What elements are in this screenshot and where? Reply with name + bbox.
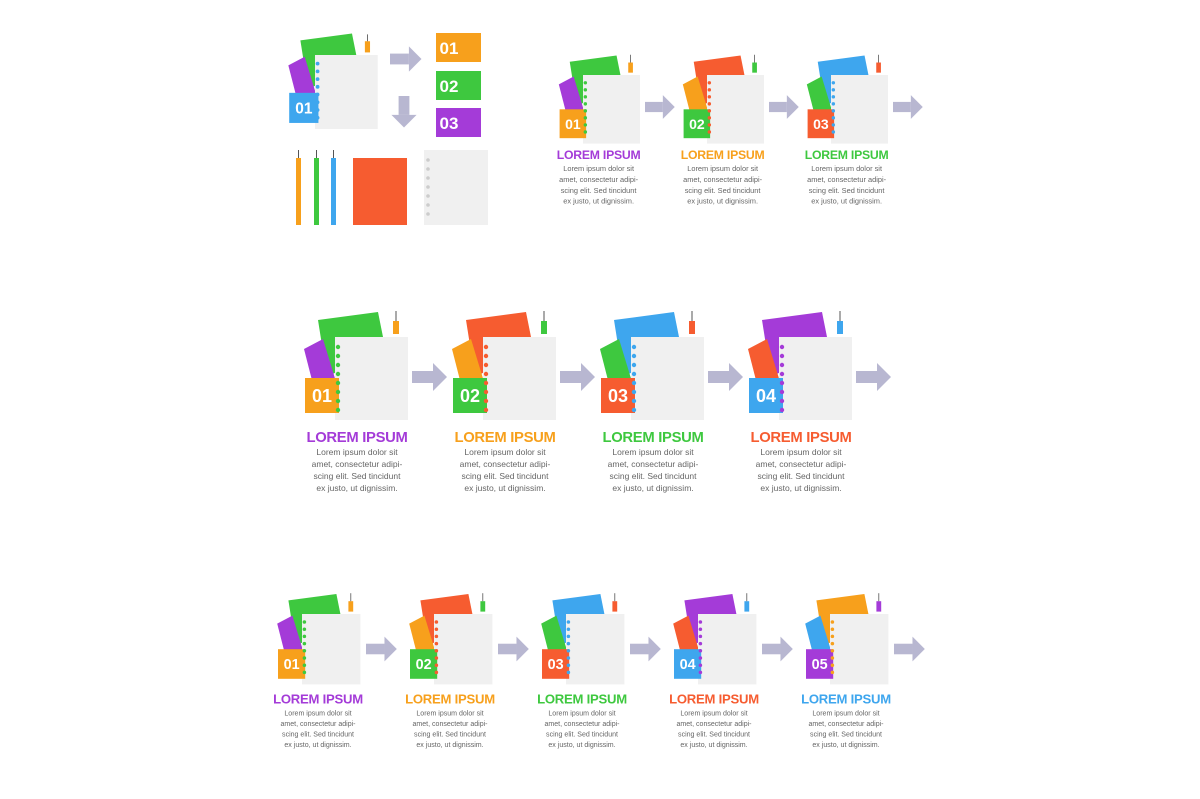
- step 05: [801, 593, 891, 749]
- step 01: [557, 55, 641, 206]
- step 05: amet, consectetur adipi-: [808, 721, 884, 728]
- step 03: scing elit. Sed tincidunt: [809, 186, 884, 195]
- arrow: [893, 95, 923, 119]
- step 01: scing elit. Sed tincidunt: [561, 186, 636, 195]
- step 02: Lorem ipsum dolor sit: [464, 447, 546, 457]
- step 04: Lorem ipsum dolor sit: [760, 447, 842, 457]
- step 02: scing elit. Sed tincidunt: [685, 186, 760, 195]
- step 03: ex justo, ut dignissim.: [612, 483, 694, 493]
- step 02: 02: [689, 116, 705, 132]
- step 03: [600, 311, 704, 493]
- panel: top-left kit: [288, 33, 488, 225]
- step 03: ex justo, ut dignissim.: [548, 742, 616, 749]
- step 02: 02: [460, 386, 480, 406]
- step 02: LOREM IPSUM: [681, 148, 765, 162]
- step 03: Lorem ipsum dolor sit: [811, 164, 882, 173]
- step 01: [273, 593, 363, 749]
- step 02: amet, consectetur adipi-: [460, 459, 551, 469]
- step 01: LOREM IPSUM: [306, 430, 408, 446]
- step 02: LOREM IPSUM: [454, 430, 556, 446]
- step 03: 03: [548, 657, 564, 673]
- step 01: Lorem ipsum dolor sit: [563, 164, 634, 173]
- step 01: [304, 311, 408, 493]
- step 01: 01: [565, 116, 581, 132]
- arrow: [412, 363, 447, 391]
- step 02: amet, consectetur adipi-: [412, 721, 488, 728]
- step 03: Lorem ipsum dolor sit: [548, 711, 616, 718]
- step 02: 02: [416, 657, 432, 673]
- step 01: LOREM IPSUM: [557, 148, 641, 162]
- step 03: [537, 593, 627, 749]
- step 04: Lorem ipsum dolor sit: [680, 711, 748, 718]
- step 01: 01: [312, 386, 332, 406]
- step 02: scing elit. Sed tincidunt: [414, 731, 486, 738]
- step 02: Lorem ipsum dolor sit: [687, 164, 758, 173]
- icon: notebook kit: [288, 34, 378, 129]
- arrow: [856, 363, 891, 391]
- step 01: Lorem ipsum dolor sit: [284, 711, 352, 718]
- arrow: [762, 637, 793, 661]
- number tags: 02: [440, 77, 458, 96]
- step 01: amet, consectetur adipi-: [280, 721, 356, 728]
- step 05: 05: [812, 657, 828, 673]
- arrow: [560, 363, 595, 391]
- step 01: amet, consectetur adipi-: [559, 175, 639, 184]
- panel: row 3 (5 steps): [273, 593, 925, 749]
- step 01: scing elit. Sed tincidunt: [282, 731, 354, 738]
- step 04: [669, 593, 759, 749]
- panel: row 2 (4 steps): [304, 311, 891, 493]
- step 03: LOREM IPSUM: [602, 430, 704, 446]
- step 04: [748, 311, 852, 493]
- step 03: scing elit. Sed tincidunt: [610, 471, 697, 481]
- step 02: [452, 311, 556, 493]
- step 04: amet, consectetur adipi-: [756, 459, 847, 469]
- step 04: ex justo, ut dignissim.: [680, 742, 748, 749]
- arrow: [630, 637, 661, 661]
- step 04: LOREM IPSUM: [750, 430, 852, 446]
- step 01: Lorem ipsum dolor sit: [316, 447, 398, 457]
- step 04: 04: [756, 386, 776, 406]
- step 01: amet, consectetur adipi-: [312, 459, 403, 469]
- arrow: [894, 637, 925, 661]
- step 03: amet, consectetur adipi-: [608, 459, 699, 469]
- step 03: amet, consectetur adipi-: [807, 175, 887, 184]
- icon: pencils: [296, 150, 336, 225]
- step 01: ex justo, ut dignissim.: [316, 483, 398, 493]
- panel: row 1 (3 steps): [557, 55, 923, 206]
- step 05: LOREM IPSUM: [801, 692, 891, 707]
- arrow: [708, 363, 743, 391]
- icon: notebook kit: 01: [295, 100, 313, 117]
- step 01: ex justo, ut dignissim.: [563, 197, 634, 206]
- icon: blank notebook: [424, 150, 488, 225]
- arrow: [645, 95, 675, 119]
- step 02: amet, consectetur adipi-: [683, 175, 763, 184]
- step 03: 03: [608, 386, 628, 406]
- arrow: down: [391, 96, 417, 128]
- step 03: ex justo, ut dignissim.: [811, 197, 882, 206]
- step 02: ex justo, ut dignissim.: [464, 483, 546, 493]
- number tags: 01: [440, 39, 458, 58]
- step 03: [805, 55, 889, 206]
- step 02: [405, 593, 495, 749]
- arrow: [498, 637, 529, 661]
- step 03: amet, consectetur adipi-: [544, 721, 620, 728]
- step 04: ex justo, ut dignissim.: [760, 483, 842, 493]
- icon: orange sheet: [353, 158, 407, 225]
- step 02: scing elit. Sed tincidunt: [462, 471, 549, 481]
- step 05: Lorem ipsum dolor sit: [812, 711, 880, 718]
- step 03: scing elit. Sed tincidunt: [546, 731, 618, 738]
- step 01: ex justo, ut dignissim.: [284, 742, 352, 749]
- step 04: scing elit. Sed tincidunt: [758, 471, 845, 481]
- arrow: [769, 95, 799, 119]
- step 02: LOREM IPSUM: [405, 692, 495, 707]
- arrow: [366, 637, 397, 661]
- step 02: Lorem ipsum dolor sit: [416, 711, 484, 718]
- step 01: scing elit. Sed tincidunt: [314, 471, 401, 481]
- step 03: LOREM IPSUM: [537, 692, 627, 707]
- step 02: ex justo, ut dignissim.: [416, 742, 484, 749]
- step 02: [681, 55, 765, 206]
- step 05: scing elit. Sed tincidunt: [810, 731, 882, 738]
- step 03: Lorem ipsum dolor sit: [612, 447, 694, 457]
- step 04: amet, consectetur adipi-: [676, 721, 752, 728]
- step 02: ex justo, ut dignissim.: [687, 197, 758, 206]
- step 04: LOREM IPSUM: [669, 692, 759, 707]
- step 01: LOREM IPSUM: [273, 692, 363, 707]
- number tags: [436, 33, 481, 137]
- step 04: scing elit. Sed tincidunt: [678, 731, 750, 738]
- number tags: 03: [440, 114, 458, 133]
- arrow: right: [390, 46, 422, 72]
- step 01: 01: [284, 657, 300, 673]
- step 03: LOREM IPSUM: [805, 148, 889, 162]
- step 04: 04: [680, 657, 696, 673]
- step 05: ex justo, ut dignissim.: [812, 742, 880, 749]
- step 03: 03: [813, 116, 829, 132]
